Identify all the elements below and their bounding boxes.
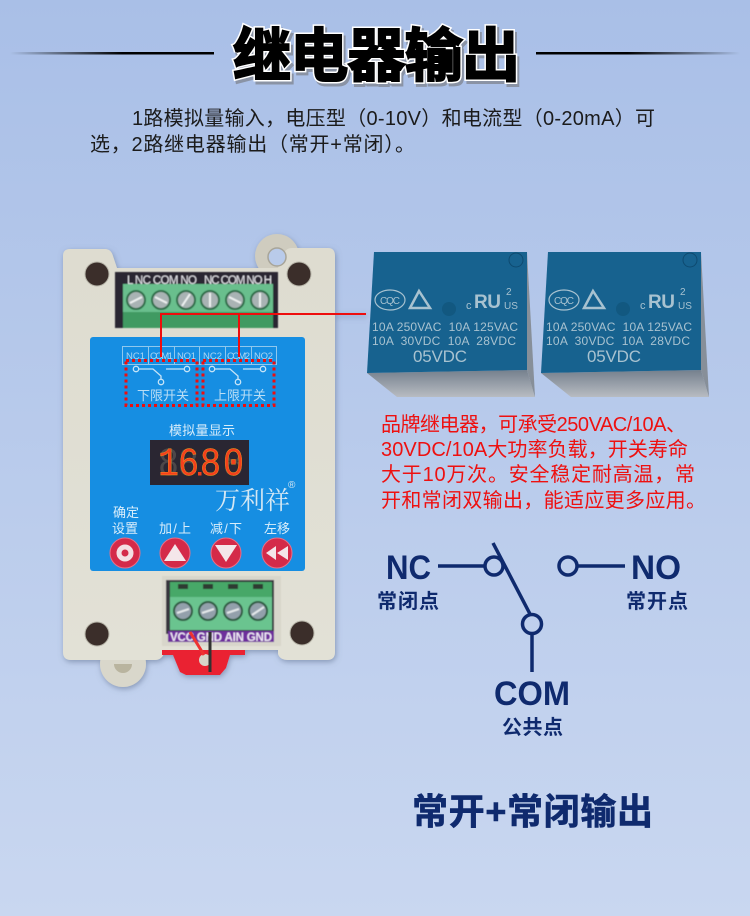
LED display: 8 (200, 443, 221, 488)
lower limit switch: 下限开关 (137, 388, 189, 403)
relay photo 2: 2 (680, 287, 686, 298)
bottom terminal block: VCC GND AIN GND (170, 632, 272, 644)
blue control panel (90, 337, 305, 571)
brand: 万利祥 (215, 481, 290, 517)
NC label (377, 549, 439, 613)
brand: ® (288, 480, 296, 491)
terminal label table: NO2 (254, 351, 273, 362)
buttons (110, 538, 292, 568)
button labels: 设置 (112, 521, 138, 536)
relay photo 1: 05VDC (413, 347, 467, 366)
switch diagram (377, 543, 688, 739)
relay photo 2: 10A 250VAC 10A 125VAC (546, 320, 692, 334)
LED display: 8 (200, 443, 221, 488)
relay photo 1: 10A 30VDC 10A 28VDC (372, 334, 516, 348)
top terminal block: NC COM NO H (204, 275, 272, 287)
device case (63, 234, 335, 687)
red connector and wires (162, 632, 245, 675)
button labels (112, 505, 290, 536)
NO label: NO (631, 549, 681, 587)
red relay description: 品牌继电器，可承受250VAC/10A、 (381, 413, 686, 436)
terminal label table: NC1 (126, 351, 145, 362)
red relay description: 大于10万次。安全稳定耐高温，常 (381, 463, 695, 486)
terminal label table: NC2 (203, 351, 222, 362)
lower limit switch (133, 366, 190, 403)
red relay description: 30VDC/10A大功率负载，开关寿命 (381, 438, 688, 461)
relay photo 2: RU (648, 292, 675, 313)
output type heading: 常开+常闭输出 (412, 791, 653, 832)
bottom terminal block (162, 576, 281, 646)
COM label: 公共点 (502, 716, 563, 739)
intro text (90, 107, 655, 156)
COM label (494, 675, 570, 739)
relay photo 2: c (640, 300, 646, 312)
title (10, 24, 740, 92)
relay photo 2: 10A 30VDC 10A 28VDC (546, 334, 690, 348)
LED display: 0 (223, 443, 244, 488)
relay photo 2 (541, 252, 709, 397)
intro text: 1路模拟量输入，电压型（0-10V）和电流型（0-20mA）可 (132, 107, 655, 130)
button labels: 确定 (113, 505, 139, 520)
relay photo 1: RU (474, 292, 501, 313)
top terminal block: L NC COM NO (127, 275, 197, 287)
relay photo 1 (367, 252, 535, 397)
NO label (626, 549, 688, 613)
relay photo 1: US (504, 301, 518, 312)
LED display: 6 (178, 443, 199, 488)
NC label: 常闭点 (377, 590, 439, 613)
intro text: 选，2路继电器输出（常开+常闭）。 (90, 133, 415, 156)
relay photo 1: c (466, 300, 472, 312)
LED display (150, 440, 249, 488)
relay photo 1: CQC (380, 296, 400, 307)
mounting holes (85, 262, 314, 646)
LED display: 8 (223, 443, 244, 488)
button labels: 加/上 (159, 521, 191, 536)
button labels: 左移 (264, 521, 290, 536)
relay photo 1: 2 (506, 287, 512, 298)
device photo (63, 234, 366, 687)
red relay description: 开和常闭双输出，能适应更多应用。 (381, 489, 706, 512)
display label: 模拟量显示 (169, 423, 235, 438)
red dotted highlight boxes (126, 360, 274, 406)
red relay description (381, 413, 706, 512)
NC label: NC (386, 549, 431, 587)
terminal label table (122, 346, 276, 364)
title: 继电器输出 (235, 27, 522, 92)
button labels: 减/下 (210, 521, 242, 536)
upper limit switch (209, 366, 266, 403)
LED display: 8 (158, 443, 179, 488)
LED display: 8 (178, 443, 199, 488)
upper limit switch: 上限开关 (214, 388, 266, 403)
relay photo 2: US (678, 301, 692, 312)
terminal label table: NO1 (177, 351, 196, 362)
relay photo 1: 10A 250VAC 10A 125VAC (372, 320, 518, 334)
relay photo 2: CQC (554, 296, 574, 307)
title: 继电器输出 (233, 24, 520, 89)
top terminal block (115, 272, 278, 328)
red connection lines (161, 314, 366, 357)
switch symbol (438, 543, 625, 672)
relay photo 2: 05VDC (587, 347, 641, 366)
terminal label table: COM1 (150, 351, 173, 362)
NO label: 常开点 (626, 590, 688, 613)
title: 继电器输出 (233, 24, 520, 89)
terminal label table: COM2 (227, 351, 250, 362)
COM label: COM (494, 675, 570, 713)
LED display: 1 (158, 443, 179, 488)
